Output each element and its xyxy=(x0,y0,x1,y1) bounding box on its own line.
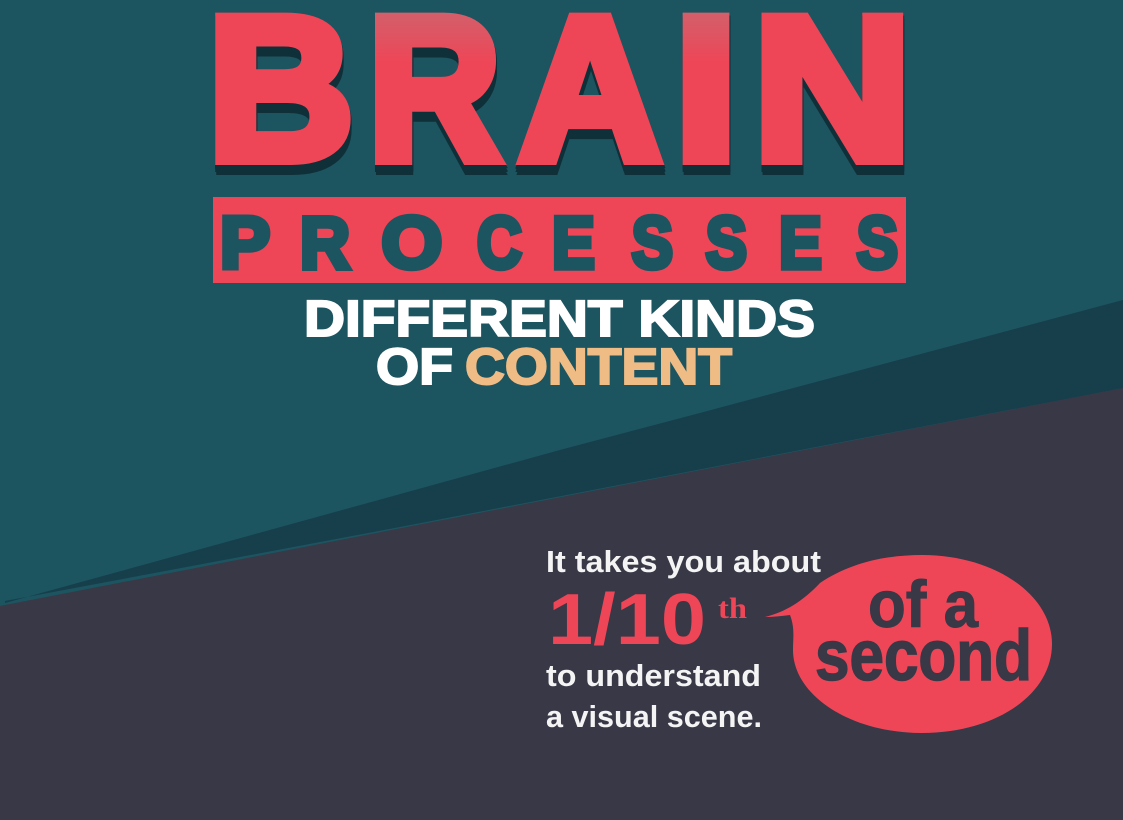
callout: speech bubble of a second: of a xyxy=(868,567,979,641)
subtitle band: PROCESSES: P xyxy=(220,202,270,284)
text block: visual scene fact: a visual scene. xyxy=(546,699,762,734)
text block: visual scene fact xyxy=(546,544,821,734)
subtitle band: PROCESSES: S xyxy=(706,203,747,284)
text block: visual scene fact: It takes you about xyxy=(546,544,821,579)
subtitle band: PROCESSES: S xyxy=(632,203,673,284)
subtitle band: PROCESSES: O xyxy=(382,203,442,284)
heading: different kinds of content: CONTENT xyxy=(465,338,732,395)
callout: speech bubble of a second: second xyxy=(815,617,1032,696)
heading: different kinds of content: OF xyxy=(376,338,453,395)
fraction: 1/10th: 1/10 xyxy=(548,580,706,660)
subtitle band: PROCESSES: S xyxy=(857,203,898,284)
heading: different kinds of content: DIFFERENT KINDS xyxy=(304,290,815,347)
subtitle band: PROCESSES: R xyxy=(300,203,350,284)
heading: different kinds of content xyxy=(304,290,815,395)
subtitle band: PROCESSES: E xyxy=(552,202,595,284)
title: BRAIN xyxy=(208,0,912,203)
callout: speech bubble of a second xyxy=(765,555,1052,733)
subtitle band: PROCESSES xyxy=(213,197,906,284)
fraction: 1/10th: th xyxy=(718,592,747,625)
text block: visual scene fact: to understand xyxy=(546,658,761,693)
subtitle band: PROCESSES: E xyxy=(779,202,822,284)
subtitle band: PROCESSES: C xyxy=(477,203,522,284)
